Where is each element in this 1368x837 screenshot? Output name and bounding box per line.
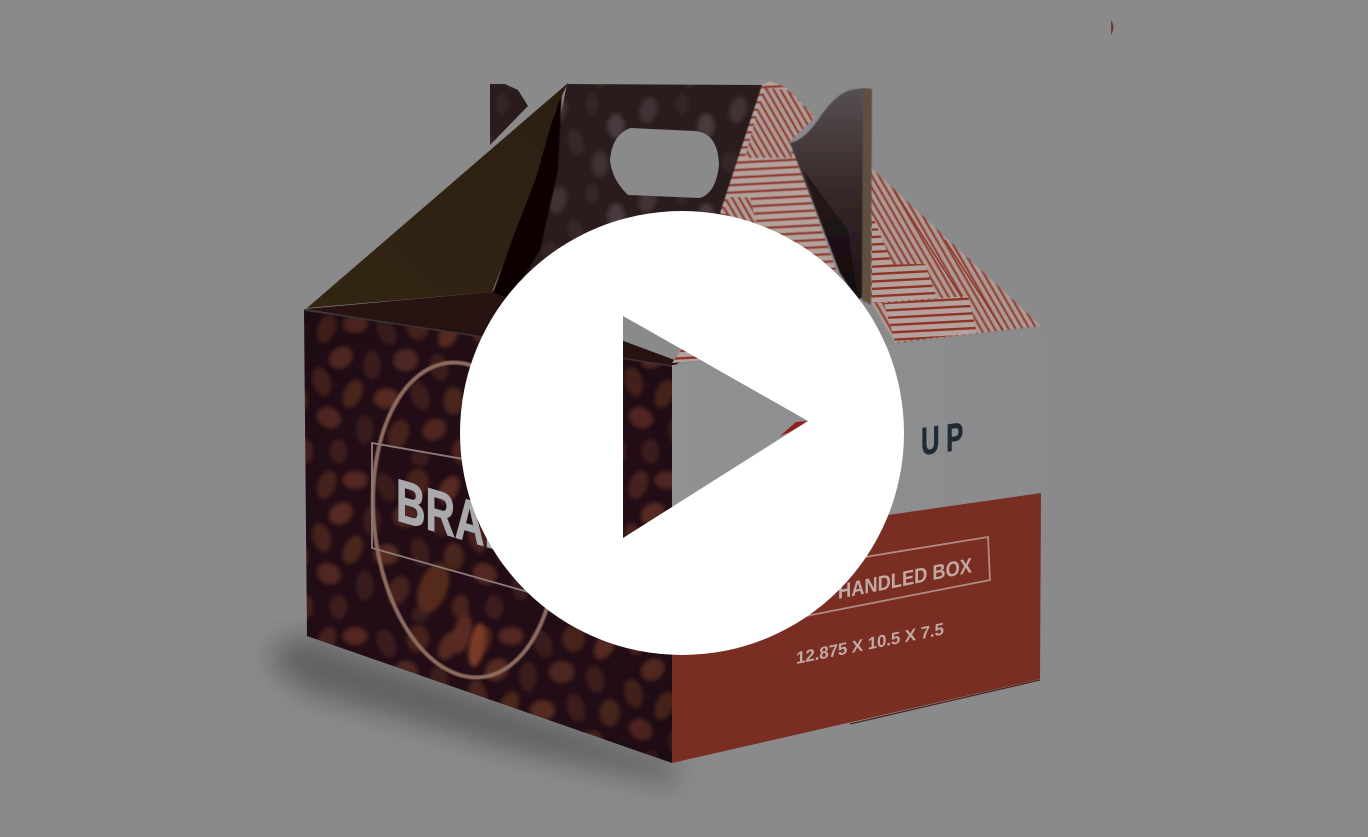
- right gable with stripes: [868, 165, 1041, 343]
- right panel red band: [672, 493, 1041, 763]
- stripes corner on right panel: [672, 349, 703, 363]
- gable front panel with handle: [492, 84, 762, 292]
- back flap: [490, 84, 528, 145]
- logo red mark: [780, 421, 808, 436]
- brand ring: [370, 360, 549, 680]
- side flap: [790, 88, 872, 305]
- inner brown flap: [307, 83, 568, 308]
- mockup text: UP: [921, 414, 970, 464]
- brand frame: [372, 443, 560, 601]
- gift box illustration: [296, 78, 1041, 770]
- product label frame: [760, 537, 990, 625]
- brand text: BRAND: [396, 467, 543, 577]
- dark inner fold: [492, 90, 562, 300]
- play button: [460, 211, 904, 655]
- product label text: HANDLED BOX: [838, 554, 972, 604]
- stripes on gable front: [720, 81, 837, 272]
- panel lower edge: [850, 680, 1040, 724]
- floor shadow: [266, 634, 680, 785]
- small red speck: [1111, 20, 1114, 35]
- lid top: [304, 292, 680, 367]
- left panel with coffee beans: [296, 300, 681, 770]
- right panel white band: [672, 330, 1041, 546]
- dimensions text: 12.875 X 10.5 X 7.5: [796, 618, 944, 668]
